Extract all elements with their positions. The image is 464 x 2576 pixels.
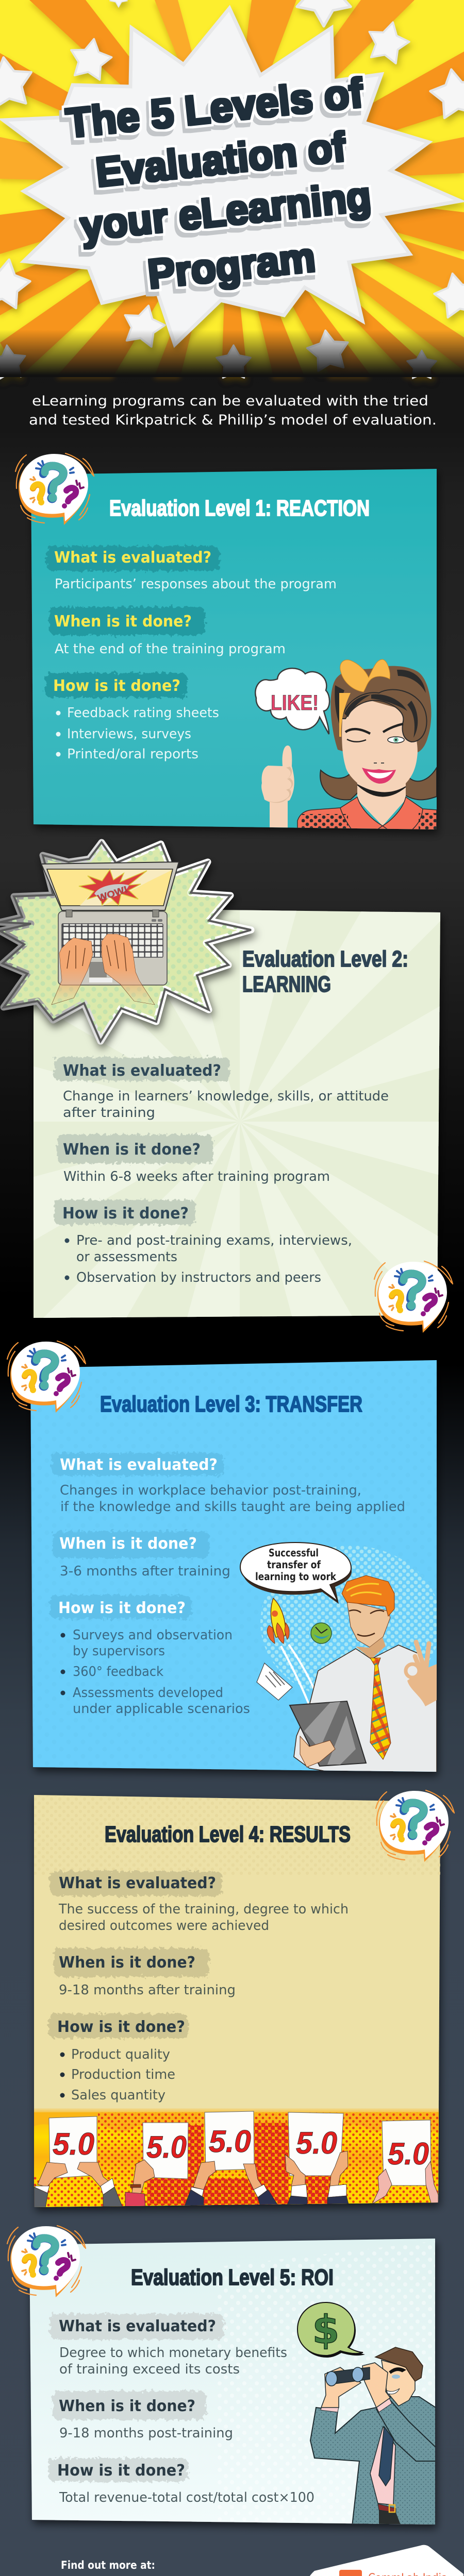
header: sunburst banner [0,0,464,380]
raised forearm [376,2400,436,2461]
question: how [54,1200,352,1285]
panel background [31,469,437,829]
face [342,701,418,799]
panel: level 5 roi [29,2239,436,2526]
question: when [57,1134,330,1184]
coat [310,2397,436,2526]
heading: Evaluation Level 2: [242,946,408,972]
panel: level 2 learning [0,606,464,1637]
eyebrow and eye [389,2368,406,2374]
sunburst rays [0,0,464,376]
score cards [49,2111,431,2185]
laptop lid [41,862,179,910]
icon: question bubble level 3 [7,1341,86,1413]
question: what: Participants’ responses about the program [55,577,337,592]
question: what [50,2314,287,2377]
question: what: after training [63,1105,155,1121]
heading: Evaluation Level 5: ROI [131,2265,334,2290]
footer: find out more: Find out more at: [61,2559,155,2571]
question: what: What is evaluated? [59,2317,216,2335]
hair [375,2347,423,2381]
green comic burst [0,842,251,1041]
title line 4: Program [145,234,318,297]
illustration: man with binoculars [297,2302,436,2526]
panel background [34,1795,440,2207]
illustration: raised 5.0 score cards [31,2108,443,2209]
question: how: Pre- and post-training exams, interviews, [76,1233,352,1248]
score text: 5.0 [146,2130,187,2164]
panel background [30,1360,437,1772]
motion lines [281,1645,320,1705]
illustration: laptop in comic burst [0,842,251,1041]
hands [362,2363,390,2408]
question: when: When is it done? [59,1954,195,1972]
raised hands and sleeves [34,2151,438,2208]
question: how [48,2013,188,2103]
question: how: Product quality [71,2047,170,2062]
panel: level 4 results [31,1795,443,2209]
score text: 5.0 [209,2124,251,2159]
question: when: 9-18 months post-training [59,2426,233,2441]
question: how: by supervisors [73,1643,165,1659]
hair bow [340,659,390,692]
icon: question bubble level 4 [376,1790,454,1862]
necktie [379,2427,393,2486]
question: what: What is evaluated? [60,1456,218,1474]
decorative white stars [0,0,464,380]
logo mark [339,2570,362,2576]
question: how: Total revenue-total cost/total cost×100 [59,2490,314,2505]
question: how: Surveys and observation [73,1628,233,1643]
question: how: Production time [71,2067,175,2082]
speech bubble: successful transfer: Successful [269,1547,319,1559]
title line 3: your eLearning [78,173,373,249]
question: when: When is it done? [63,1141,201,1159]
question: how: How is it done? [53,677,180,695]
question: what: The success of the training, degree to which [58,1902,349,1917]
score text: 5.0 [296,2126,337,2160]
hair [342,1575,394,1616]
icon: question bubble level 1 [15,453,94,525]
heading [242,946,408,997]
icon: question bubble level 2 [374,1261,453,1333]
tie [370,1658,391,1759]
question: what: of training exceed its costs [59,2362,240,2377]
question: when [53,1531,230,1579]
hand on tablet [300,1736,335,1767]
binoculars [326,2367,370,2386]
question: when [54,1948,236,1998]
question: how [45,673,219,762]
belt and trousers [378,2504,401,2526]
heading: Evaluation Level 4: RESULTS [105,1822,351,1847]
question: how: How is it done? [58,1599,186,1617]
question: how: Assessments developed [73,1685,223,1701]
title line 1: The 5 Levels of [64,70,365,146]
title line 2: Evaluation of [94,124,348,195]
comic background strip [31,2108,443,2209]
score text: 5.0 [388,2137,429,2171]
question: what: Degree to which monetary benefits [59,2345,287,2361]
speech bubble: successful transfer [240,1543,352,1604]
question: what: Changes in workplace behavior post-training, [60,1483,361,1498]
question: when [53,2391,233,2441]
title [64,70,373,297]
question: what [54,1057,389,1121]
question: how: Sales quantity [71,2088,165,2103]
white logo tab [303,2545,463,2576]
wow burst on screen [79,870,147,905]
question: how: 360° feedback [73,1664,163,1680]
question: when: At the end of the training program [55,641,286,657]
speech bubble: successful transfer: transfer of [267,1558,321,1571]
neck and face [382,2360,415,2406]
question: when: When is it done? [59,2397,195,2415]
laptop base [58,910,167,985]
question: what: if the knowledge and skills taught are being applied [60,1499,405,1515]
question: when: 3-6 months after training [60,1564,230,1579]
speech bubble: like: LIKE! [271,690,319,715]
speech bubble: successful transfer: learning to work [255,1570,337,1583]
icon: question bubble level 5 [7,2226,86,2297]
footer: find out more [41,2559,177,2576]
speech bubble: like [255,668,329,734]
question: how: or assessments [76,1249,177,1265]
score text: 5.0 [53,2127,94,2161]
question: how: under applicable scenarios [73,1701,250,1717]
clock [311,1623,332,1643]
question: what [50,1871,349,1934]
panel background [29,2239,435,2524]
typing hands [52,934,155,1005]
jaw shadow line [357,785,406,796]
question: how: How is it done? [62,1205,189,1223]
question: how: Printed/oral reports [67,747,198,762]
hair curl shading [335,670,426,726]
question: when: Within 6-8 weeks after training program [63,1169,330,1184]
speech bubble: dollar [297,2302,365,2358]
face [347,1601,390,1647]
question: what: What is evaluated? [54,549,211,567]
heading: LEARNING [242,972,331,997]
fringe curl [342,689,427,742]
panel: level 3 transfer [30,1360,441,1775]
intro text [29,393,437,428]
score text [53,2124,429,2171]
question: how [50,1595,250,1717]
question: what: What is evaluated? [63,1062,221,1080]
blouse [297,797,437,831]
panel background with rays [0,606,464,1637]
thumbs up hand [261,745,294,831]
notebook [257,1663,292,1700]
footer: logo area [303,2545,463,2576]
question: what [52,1453,405,1515]
question: how: Feedback rating sheets [67,705,219,721]
illustration: woman with thumbs up [255,659,437,831]
neck [357,783,406,825]
question: what [46,546,337,592]
question: how [48,2458,314,2505]
shirt front [370,2427,395,2505]
tablet [290,1701,366,1766]
question: when: When is it done? [54,613,192,631]
question: how: How is it done? [57,2018,185,2036]
halftone halo [260,1546,441,1700]
shirt cuffs [321,2398,392,2412]
intro text: and tested Kirkpatrick & Phillip’s model of evaluation. [29,412,437,428]
question: how: Interviews, surveys [67,726,191,742]
question: what: desired outcomes were achieved [59,1918,269,1934]
question: when: 9-18 months after training [59,1982,236,1998]
shirt [294,1645,437,1775]
question: when: When is it done? [59,1535,197,1553]
facial features [345,724,404,784]
mouth [387,2388,400,2394]
question: how: Observation by instructors and peers [76,1270,321,1285]
heading: Evaluation Level 1: REACTION [109,496,370,521]
central white starburst [3,8,460,345]
rocket [267,1598,289,1643]
lower hair flips [320,767,437,801]
question: how: How is it done? [57,2462,185,2480]
hair back [330,666,431,757]
intro text: eLearning programs can be evaluated with the tried [32,393,428,409]
question: what: What is evaluated? [59,1874,216,1892]
wow burst on screen: WOW! [96,884,129,903]
question: when [49,607,286,657]
ok hand [406,1642,437,1706]
heading: Evaluation Level 3: TRANSFER [100,1392,362,1417]
illustration: man with tablet [240,1543,441,1775]
panel: level 1 reaction [31,469,437,831]
question: what: Change in learners’ knowledge, skills, or attitude [63,1089,389,1104]
speech bubble: dollar: $ [312,2307,339,2352]
bottom fade to black [0,330,464,377]
eye [392,2375,400,2379]
